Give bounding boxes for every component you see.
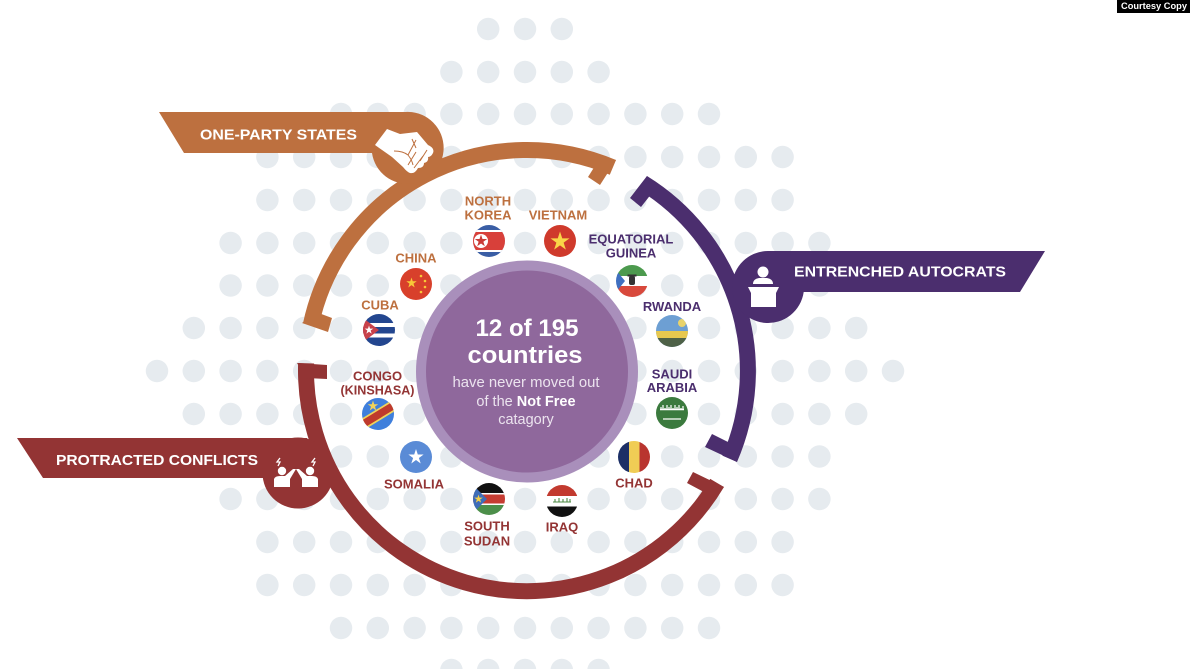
icon: two people arguing [274, 458, 318, 487]
description: of the Not Free [476, 394, 576, 410]
country: Saudi Arabia: SAUDI [652, 366, 692, 382]
country: Rwanda [643, 299, 702, 347]
country: Somalia [384, 441, 445, 492]
banner label: entrenched autocrats: ENTRENCHED AUTOCRATS [794, 264, 1006, 280]
country: Equatorial Guinea: GUINEA [606, 246, 657, 260]
country: Congo (Kinshasa) [340, 368, 414, 430]
banner: one-party states [159, 112, 444, 184]
country: Iraq [546, 485, 578, 534]
icon: clenched fist [375, 129, 433, 173]
country: North Korea: KOREA [465, 208, 512, 222]
banner label: protracted conflicts: PROTRACTED CONFLICTS [56, 452, 258, 469]
country: Congo (Kinshasa): CONGO [353, 368, 402, 384]
country: Saudi Arabia: ARABIA [647, 380, 698, 395]
country: Vietnam: VIETNAM [529, 208, 587, 222]
banner: protracted conflicts [17, 438, 334, 508]
description [452, 375, 600, 428]
country: Equatorial Guinea: EQUATORIAL [589, 232, 673, 246]
country: Vietnam [529, 208, 587, 257]
country: South Sudan [464, 483, 510, 548]
icon: speaker at podium [748, 266, 779, 307]
country: Somalia: SOMALIA [384, 476, 445, 492]
country: Cuba [361, 298, 399, 346]
arc: protracted conflicts [297, 363, 724, 591]
country: Equatorial Guinea [589, 232, 673, 297]
country: Chad: CHAD [615, 476, 653, 490]
headline: 12 of 195 [476, 315, 578, 342]
headline line two: countries [468, 342, 582, 369]
courtesy copy tag: Courtesy Copy [1121, 1, 1187, 11]
country: Chad [615, 441, 653, 490]
center circle [416, 260, 638, 482]
description: have never moved out [452, 375, 600, 391]
arc: entrenched autocrats [630, 176, 748, 462]
country: Cuba: CUBA [361, 298, 399, 312]
country: China: CHINA [395, 250, 437, 266]
country: North Korea: NORTH [465, 194, 511, 208]
country: Iraq: IRAQ [546, 520, 578, 534]
country: Saudi Arabia [647, 366, 698, 429]
description: catagory [498, 412, 555, 428]
banner label: one-party states: ONE-PARTY STATES [200, 126, 357, 144]
country: North Korea [465, 194, 512, 257]
arc: one-party states [302, 150, 616, 332]
country: Rwanda: RWANDA [643, 299, 702, 314]
banner: entrenched autocrats [732, 251, 1045, 323]
country: China [395, 250, 437, 300]
country: South Sudan: SUDAN [464, 534, 510, 548]
courtesy copy tag [1117, 0, 1190, 13]
country: Congo (Kinshasa): (KINSHASA) [340, 382, 414, 398]
country: South Sudan: SOUTH [464, 518, 510, 534]
